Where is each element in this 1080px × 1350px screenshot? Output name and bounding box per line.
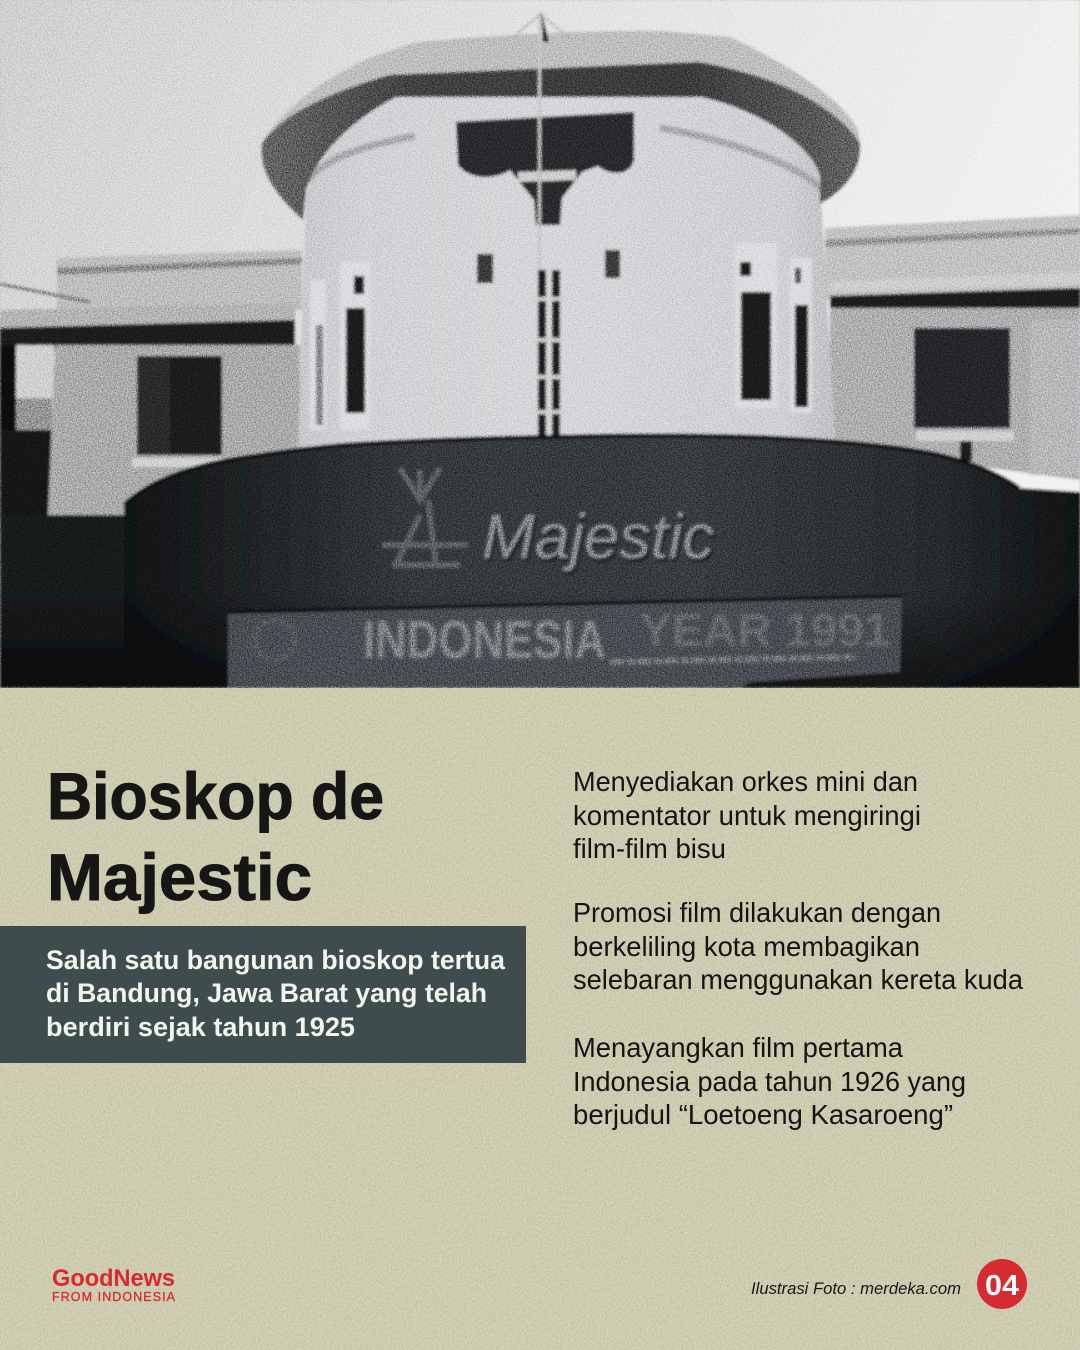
heading: Bioskop de xyxy=(47,759,384,833)
right wing of building xyxy=(825,215,1080,480)
street-level shade xyxy=(0,590,1080,688)
banner xyxy=(228,598,902,688)
photo: Majestic cinema building xyxy=(0,0,1080,688)
subtitle panel: berdiri sejak tahun 1925 xyxy=(46,1012,355,1042)
cylindrical tower xyxy=(298,90,836,450)
left wing of building xyxy=(0,250,302,688)
neon sign: Majestic: Majestic xyxy=(482,502,714,572)
logo: GoodNews from Indonesia xyxy=(52,1265,176,1304)
tower shoulder mouldings xyxy=(306,128,822,190)
banner lettering: YEAR 1991 xyxy=(640,604,890,656)
subtitle panel: Salah satu bangunan bioskop tertua xyxy=(46,945,506,975)
tower roof xyxy=(261,31,860,220)
fact 1: film-film bisu xyxy=(573,833,726,864)
fact 3 xyxy=(573,1032,966,1130)
logo: GoodNews from Indonesia: GoodNews xyxy=(52,1265,175,1292)
banner lettering: INDONESIA xyxy=(363,610,606,670)
kala head ornament xyxy=(456,112,634,227)
fact 2: selebaran menggunakan kereta kuda xyxy=(573,964,1023,995)
fact 2 xyxy=(573,897,1023,995)
fact 2: Promosi film dilakukan dengan xyxy=(573,897,941,928)
subtitle panel xyxy=(0,926,526,1063)
neon sign: Majestic: Majestic xyxy=(484,505,716,575)
subtitle panel: di Bandung, Jawa Barat yang telah xyxy=(46,978,487,1008)
tower windows xyxy=(316,250,808,436)
film grain xyxy=(0,0,1080,688)
photo credit: Ilustrasi Foto : merdeka.com xyxy=(751,1279,961,1298)
neon sign: Majestic xyxy=(382,468,716,575)
fact 2: berkeliling kota membagikan xyxy=(573,931,920,962)
fact 1: Menyediakan orkes mini dan xyxy=(573,766,918,797)
fact 3: berjudul “Loetoeng Kasaroeng” xyxy=(573,1099,953,1130)
heading xyxy=(47,759,384,914)
text block: facts xyxy=(573,766,1023,1130)
heading: Majestic xyxy=(47,840,312,914)
fact 1 xyxy=(573,766,921,864)
banner lettering xyxy=(255,604,890,670)
window frames xyxy=(310,243,812,430)
sky xyxy=(0,0,1080,688)
fact 3: Indonesia pada tahun 1926 yang xyxy=(573,1066,966,1097)
fact 1: komentator untuk mengiringi xyxy=(573,800,921,831)
antenna xyxy=(512,10,570,435)
panel: paper background xyxy=(0,688,1080,1350)
page number badge: 04 xyxy=(985,1270,1019,1302)
fact 3: Menayangkan film pertama xyxy=(573,1032,903,1063)
page number badge xyxy=(977,1259,1027,1309)
canopy xyxy=(124,436,1080,688)
logo: GoodNews from Indonesia: FROM INDONESIA xyxy=(52,1290,176,1304)
